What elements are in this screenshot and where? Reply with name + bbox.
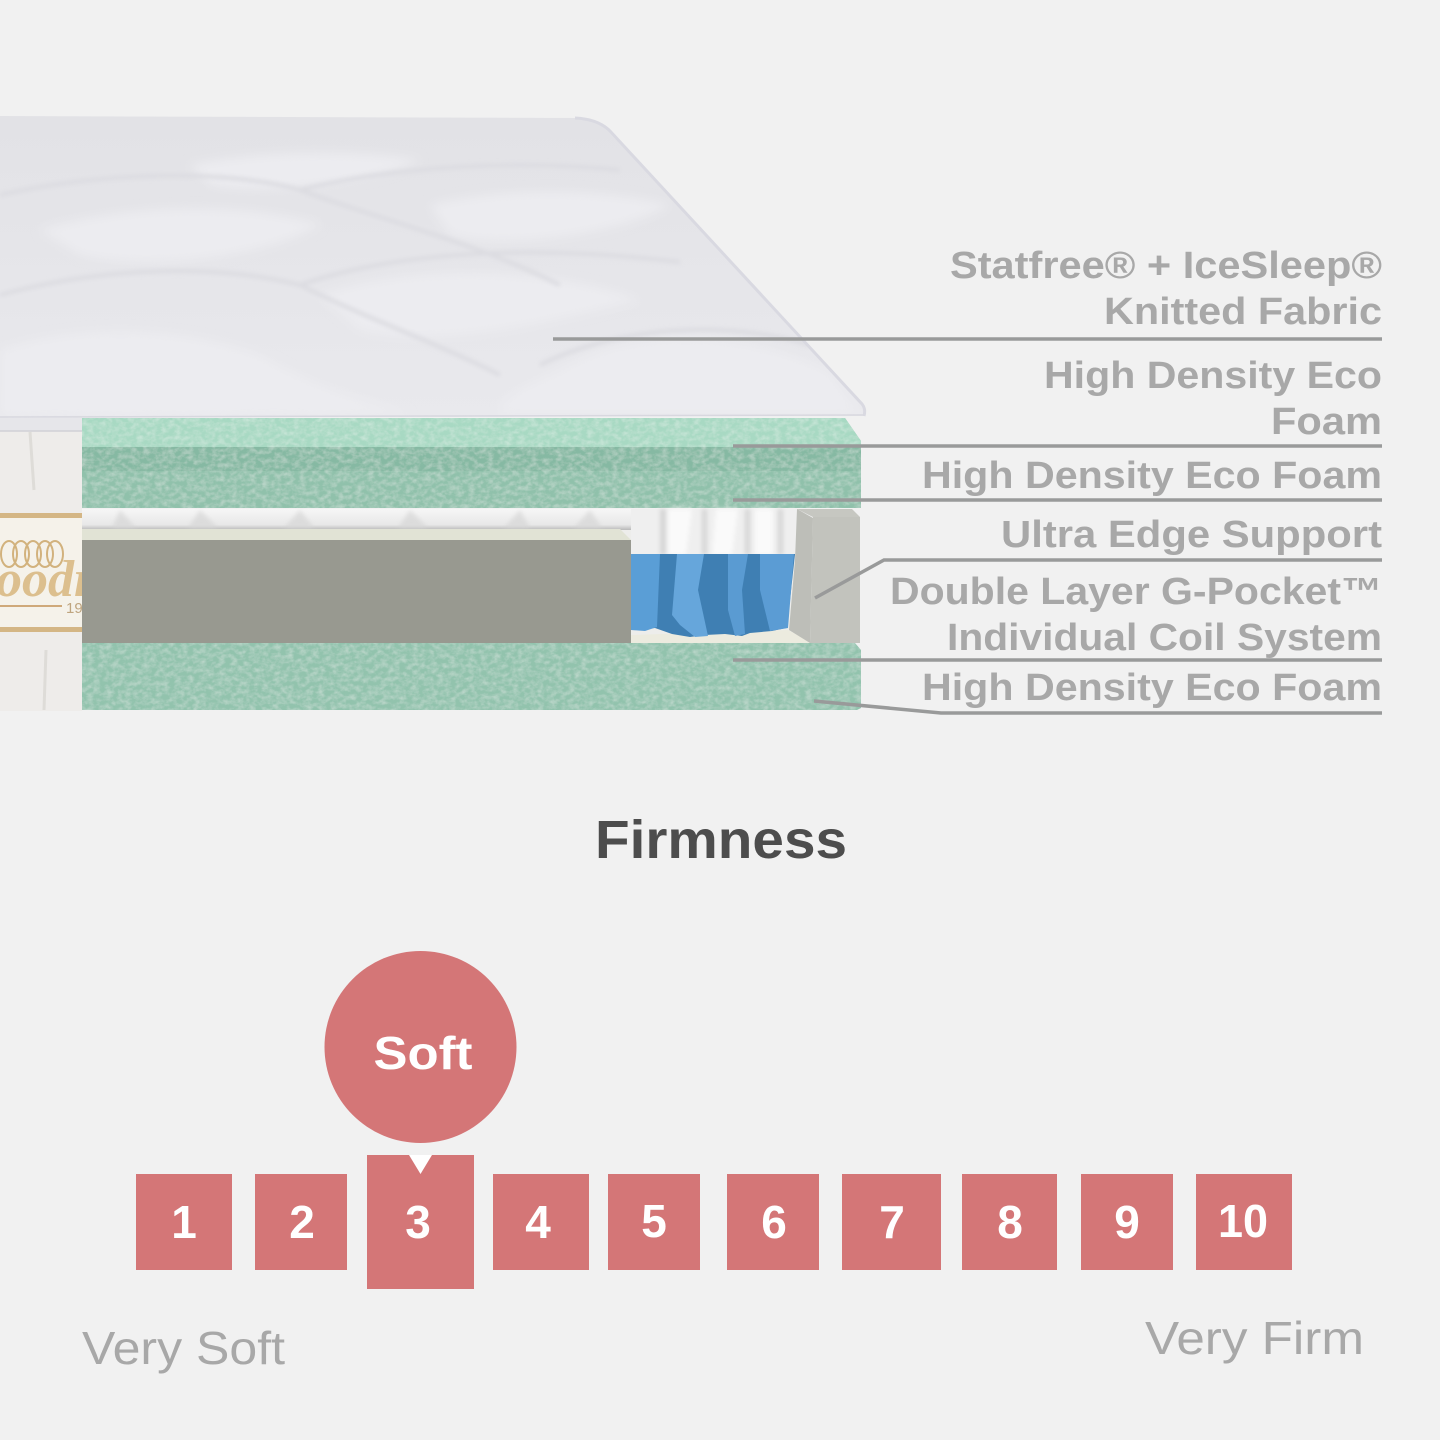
scale box 2: 2 bbox=[289, 1196, 315, 1248]
scale box 10: 10 bbox=[1218, 1195, 1268, 1247]
lower high density eco foam bbox=[82, 643, 861, 710]
label: high density eco foam 1 bbox=[1044, 355, 1382, 443]
heading: firmness: Firmness bbox=[595, 810, 847, 870]
label: high density eco foam 2: High Density Eco Foam bbox=[922, 455, 1382, 497]
scale box 7: 7 bbox=[879, 1196, 905, 1248]
mattress side cover with logo bbox=[0, 416, 95, 711]
label: Statfree + IceSleep knitted fabric: Knitted Fabric bbox=[1104, 291, 1382, 333]
scale box 6 bbox=[727, 1174, 819, 1270]
label: ultra edge support: Ultra Edge Support bbox=[1001, 514, 1382, 556]
scale box 4 bbox=[493, 1174, 589, 1270]
callout: soft: Soft bbox=[374, 1027, 472, 1079]
gray block: centre cut-away bbox=[82, 529, 631, 643]
pocket coil layer bbox=[82, 509, 812, 643]
label: Statfree + IceSleep knitted fabric: Statfree® + IceSleep® bbox=[950, 245, 1382, 287]
scale label: very soft: Very Soft bbox=[82, 1322, 285, 1374]
scale box 1: 1 bbox=[171, 1196, 197, 1248]
scale box 10 bbox=[1196, 1174, 1292, 1270]
ultra edge support bbox=[789, 509, 860, 643]
mattress top: quilted knitted fabric bbox=[0, 116, 865, 418]
mattress side cover with logo: 19 bbox=[66, 600, 83, 617]
label: double layer g-pocket individual coil system bbox=[890, 571, 1382, 659]
scale box 8 bbox=[962, 1174, 1057, 1270]
scale box 8: 8 bbox=[997, 1196, 1023, 1248]
scale box 1 bbox=[136, 1174, 232, 1270]
firmness scale 1 to 10 bbox=[136, 1155, 1292, 1289]
scale box 7 bbox=[842, 1174, 941, 1270]
label: double layer g-pocket individual coil system: Individual Coil System bbox=[947, 617, 1382, 659]
mattress cross-section illustration bbox=[0, 116, 865, 711]
scale box 4: 4 bbox=[525, 1196, 551, 1248]
callout: soft bbox=[324, 951, 516, 1143]
scale box 6: 6 bbox=[761, 1196, 787, 1248]
foam layers: upper high density eco foam bbox=[82, 418, 861, 508]
label: high density eco foam 3: High Density Eco Foam bbox=[922, 667, 1382, 709]
scale box 9 bbox=[1081, 1174, 1173, 1270]
label: high density eco foam 1: Foam bbox=[1271, 401, 1382, 443]
scale box 2 bbox=[255, 1174, 347, 1270]
label: Statfree + IceSleep knitted fabric bbox=[950, 245, 1382, 333]
scale label: very firm: Very Firm bbox=[1145, 1312, 1364, 1364]
scale box 5 bbox=[608, 1174, 700, 1270]
scale box 3 selected: 3 bbox=[405, 1196, 431, 1248]
label: high density eco foam 1: High Density Eco bbox=[1044, 355, 1382, 397]
scale box 5: 5 bbox=[641, 1195, 667, 1247]
scale box 9: 9 bbox=[1114, 1196, 1140, 1248]
scale box 3 selected bbox=[367, 1155, 474, 1289]
label: double layer g-pocket individual coil system: Double Layer G-Pocket™ bbox=[890, 571, 1382, 613]
leader lines bbox=[553, 339, 1382, 713]
